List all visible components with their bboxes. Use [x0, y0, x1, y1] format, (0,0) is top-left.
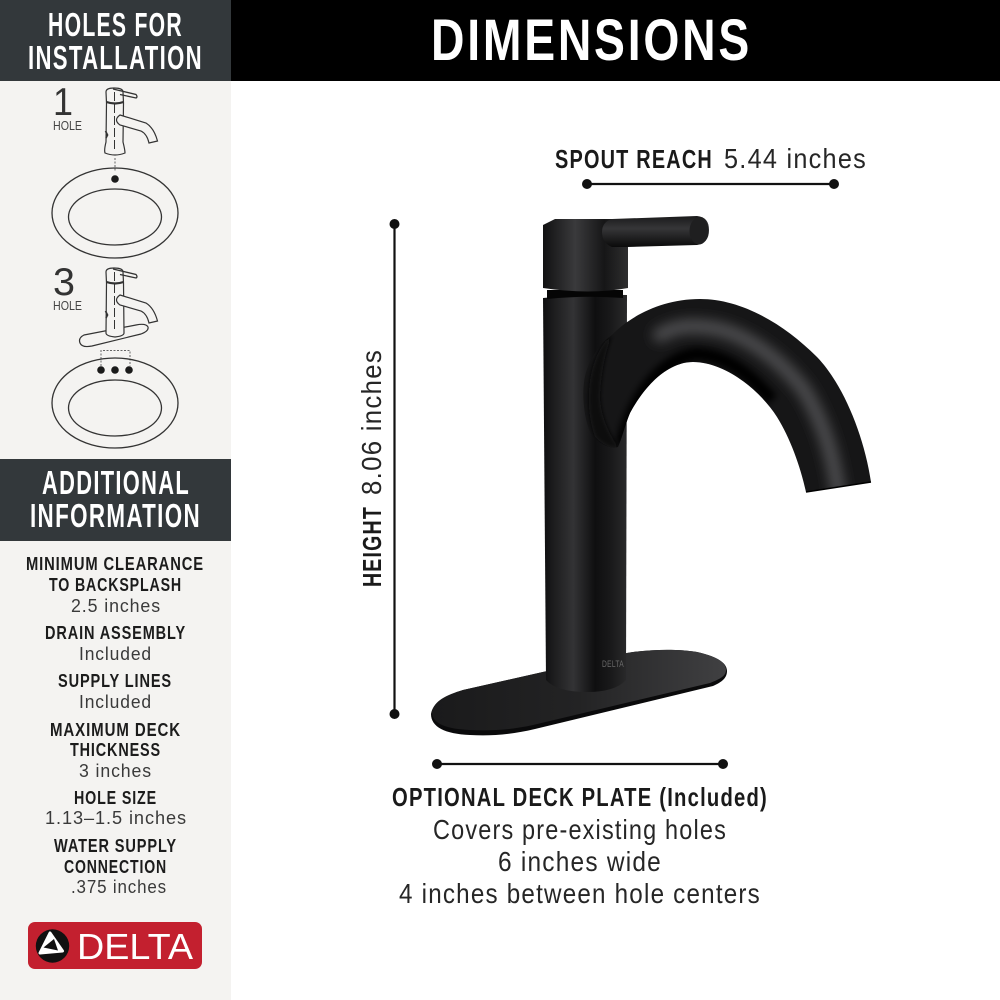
panel: left sidebar background: [0, 0, 231, 1000]
label: 1 hole: [53, 81, 82, 133]
text block: optional deck plate: OPTIONAL DECK PLATE (Included): [392, 782, 768, 812]
label: 1 hole: 1: [53, 81, 73, 124]
dimension: spout reach: 5.44 inches: [724, 143, 867, 174]
faucet column: [543, 295, 627, 692]
icon: deck plate line drawing: [80, 324, 148, 347]
deck plate: [431, 650, 727, 735]
photo: black faucet: [431, 216, 871, 735]
panel: three hole installation diagram: [52, 261, 178, 448]
text block: additional information list: THICKNESS: [70, 740, 161, 760]
title: dimensions: DIMENSIONS: [431, 8, 752, 73]
dimension: spout reach: SPOUT REACH: [555, 146, 713, 174]
text block: additional information list: [26, 554, 204, 897]
text block: additional information list: MAXIMUM DECK: [50, 720, 181, 740]
text block: optional deck plate: 4 inches between hole centers: [399, 878, 761, 909]
text block: additional information list: WATER SUPPLY: [54, 836, 177, 856]
text block: optional deck plate: Covers pre-existing holes: [433, 814, 727, 845]
label: 3 hole: [53, 261, 82, 313]
spout: [583, 299, 871, 492]
text block: additional information list: CONNECTION: [64, 857, 167, 877]
dimension: deck plate width: [432, 759, 728, 769]
dimension: spout reach: [555, 143, 867, 189]
faucet head: [543, 219, 628, 292]
dotted connector: [101, 350, 130, 366]
dimension: height: 8.06 inches: [356, 349, 387, 495]
heading: additional information: INFORMATION: [30, 497, 201, 534]
lever handle: [602, 216, 709, 247]
text block: additional information list: .375 inches: [71, 876, 167, 897]
text block: additional information list: Included: [79, 643, 152, 664]
logo: delta: [28, 922, 202, 969]
text block: additional information list: SUPPLY LINES: [58, 671, 172, 691]
label: 1 hole: HOLE: [53, 119, 82, 133]
heading: holes for installation: [0, 0, 231, 81]
dimension: height: HEIGHT: [359, 506, 387, 587]
text block: additional information list: Included: [79, 691, 152, 712]
title: dimensions: [231, 0, 1000, 81]
logo: delta: DELTA: [77, 926, 193, 967]
text block: additional information list: DRAIN ASSEMBLY: [45, 623, 186, 643]
text block: additional information list: 1.13–1.5 inches: [45, 807, 187, 828]
icon: faucet line drawing: [106, 268, 158, 337]
label: 3 hole: 3: [53, 261, 75, 304]
dimension: height: [356, 219, 400, 719]
text block: additional information list: 2.5 inches: [71, 595, 161, 616]
text block: additional information list: HOLE SIZE: [74, 788, 157, 808]
icon: sink basin with one hole: [52, 168, 178, 258]
text block: additional information list: MINIMUM CLEARANCE: [26, 554, 204, 574]
dotted connector: [114, 158, 116, 172]
label: 3 hole: HOLE: [53, 299, 82, 313]
text block: additional information list: TO BACKSPLASH: [49, 575, 182, 595]
text block: optional deck plate: 6 inches wide: [498, 846, 662, 877]
heading: holes for installation: HOLES FOR: [48, 6, 183, 43]
icon: sink basin with three holes: [52, 358, 178, 448]
heading: holes for installation: INSTALLATION: [28, 39, 203, 76]
icon: faucet line drawing: [105, 88, 158, 155]
delta engraving: DELTA: [602, 659, 624, 670]
text block: optional deck plate: [392, 782, 768, 909]
text block: additional information list: 3 inches: [79, 760, 152, 781]
heading: additional information: ADDITIONAL: [42, 464, 190, 501]
heading: additional information: [0, 459, 231, 541]
collar: [547, 290, 623, 299]
panel: one hole installation diagram: [52, 81, 178, 258]
